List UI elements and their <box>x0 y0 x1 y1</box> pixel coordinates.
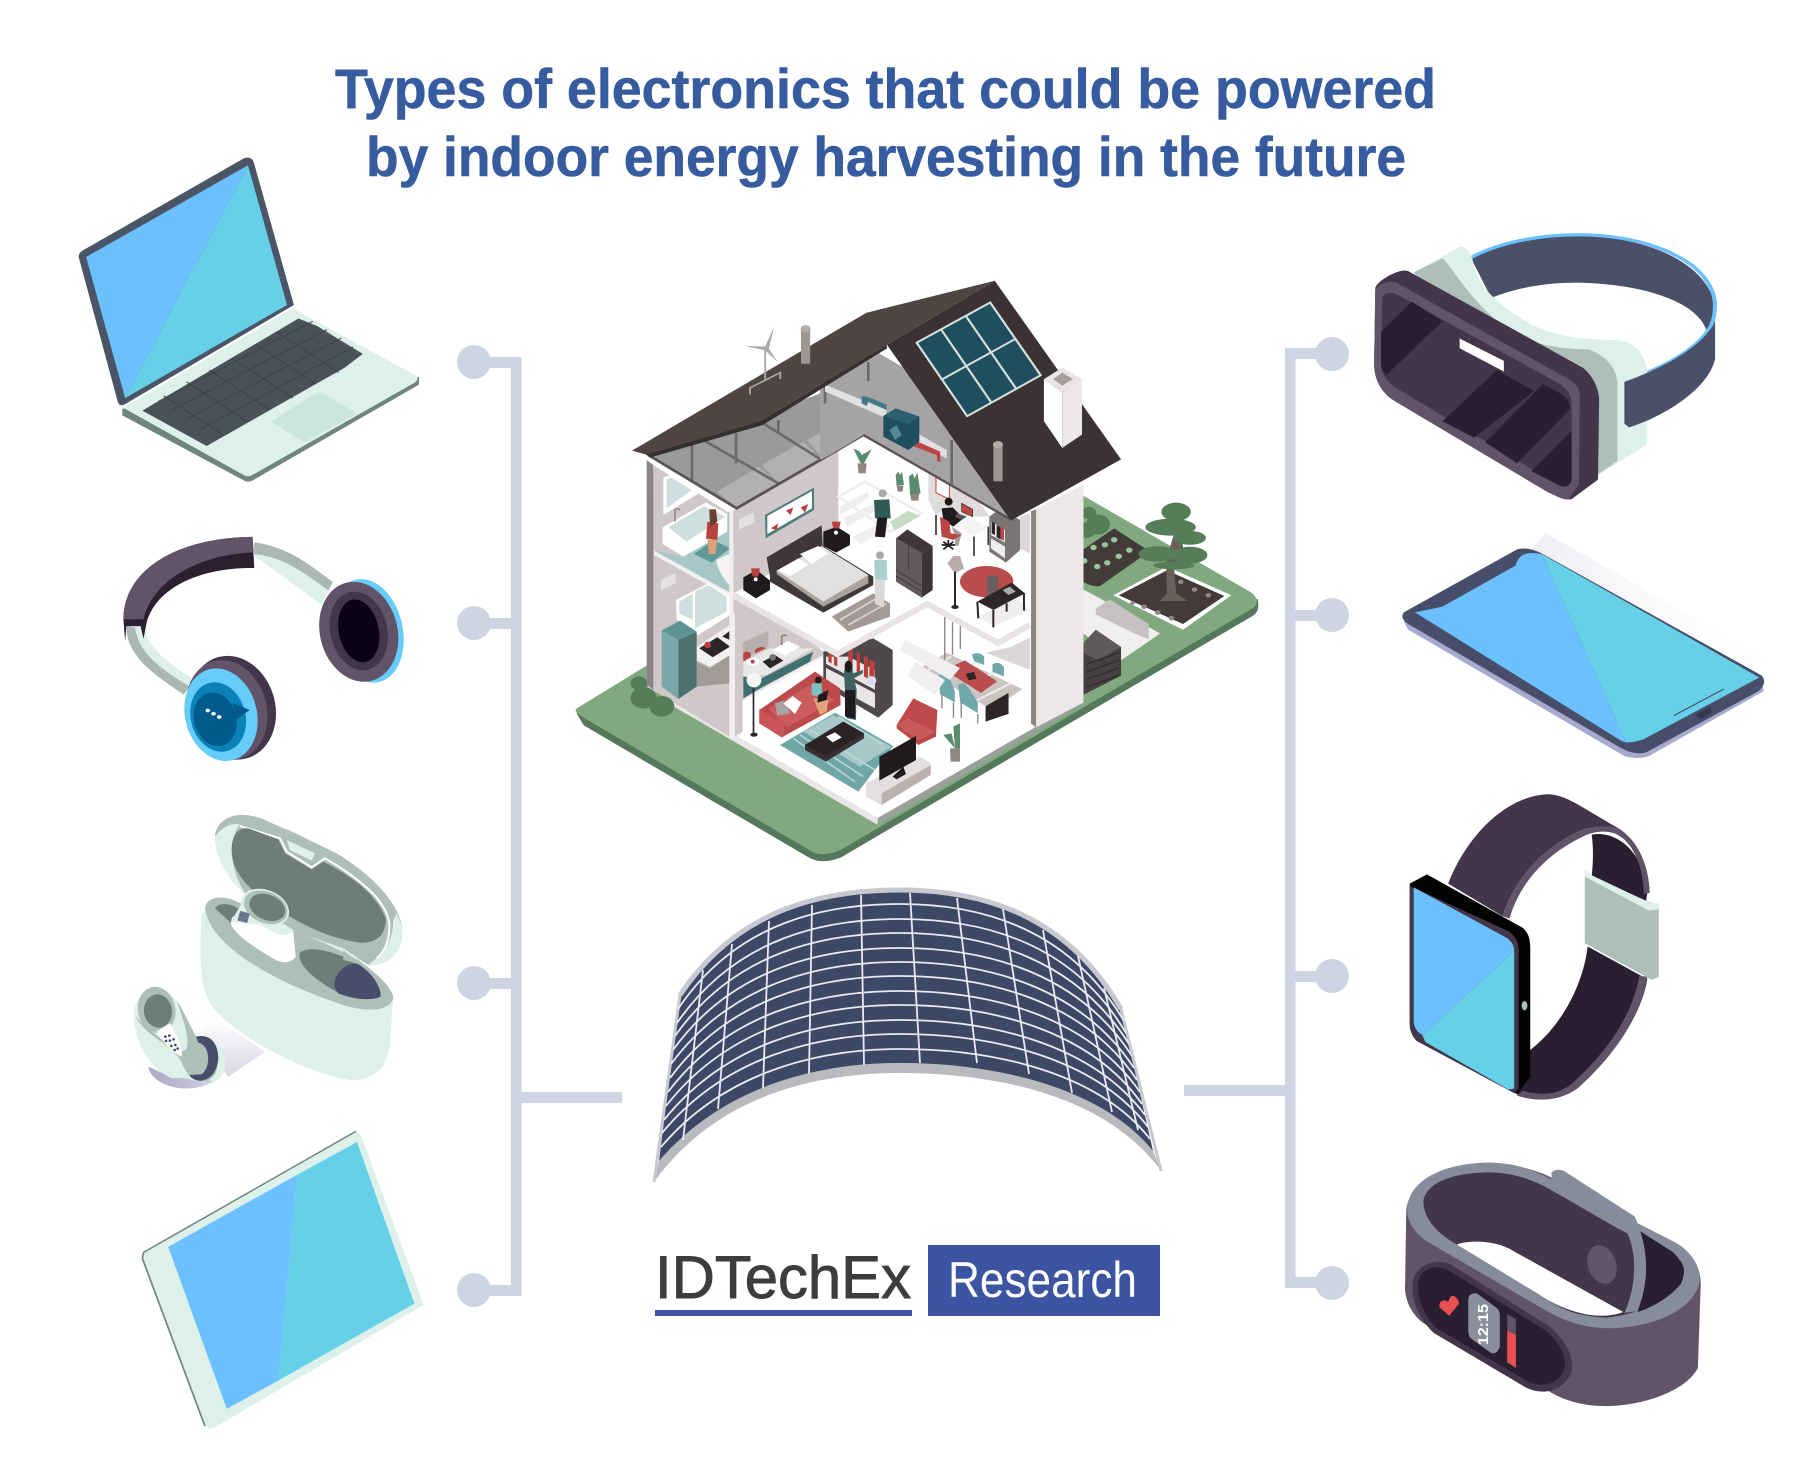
upper floor slab <box>733 400 1030 695</box>
icon: laptop <box>79 158 419 482</box>
title <box>335 57 1436 188</box>
left outer wall and lower kitchen <box>647 460 773 737</box>
roof <box>632 281 1121 521</box>
roof vents and wind turbine <box>744 325 1003 481</box>
exterior bushes <box>631 676 674 717</box>
garden <box>1077 503 1231 695</box>
icon: smartphone <box>1402 533 1795 758</box>
logo: IDTechEx Research: Research <box>948 1252 1137 1308</box>
bedroom and bathroom back wall <box>733 452 890 632</box>
icon: headphones <box>123 537 412 765</box>
icon: fitness band <box>1405 1163 1701 1406</box>
logo: IDTechEx Research <box>655 1244 1160 1316</box>
interior floor <box>646 435 1083 825</box>
chimney <box>1044 368 1082 448</box>
icon: fitness band: 12:15 <box>1476 1304 1492 1345</box>
title: Types of electronics that could be powered <box>335 57 1436 120</box>
left connector bracket <box>457 345 622 1307</box>
icon: tablet <box>142 1131 424 1428</box>
house illustration <box>576 281 1258 861</box>
icon: wireless earbuds case <box>134 815 403 1088</box>
ground plate <box>576 496 1258 861</box>
right connector bracket <box>1184 337 1349 1300</box>
rooftop solar panel <box>917 303 1041 416</box>
attic glazing left <box>647 377 863 509</box>
bedroom upper floor furniture and people <box>838 448 1030 627</box>
icon: smartwatch <box>1410 794 1659 1100</box>
flexible solar panel <box>654 890 1161 1182</box>
logo: IDTechEx Research: IDTechEx <box>655 1244 911 1311</box>
dining area <box>920 616 1022 723</box>
icon: VR headset <box>1374 235 1715 499</box>
attic glazing right with ventilation unit <box>820 337 1012 520</box>
title: by indoor energy harvesting in the future <box>366 125 1406 188</box>
living room <box>730 613 960 805</box>
right tower wall <box>1031 484 1083 727</box>
